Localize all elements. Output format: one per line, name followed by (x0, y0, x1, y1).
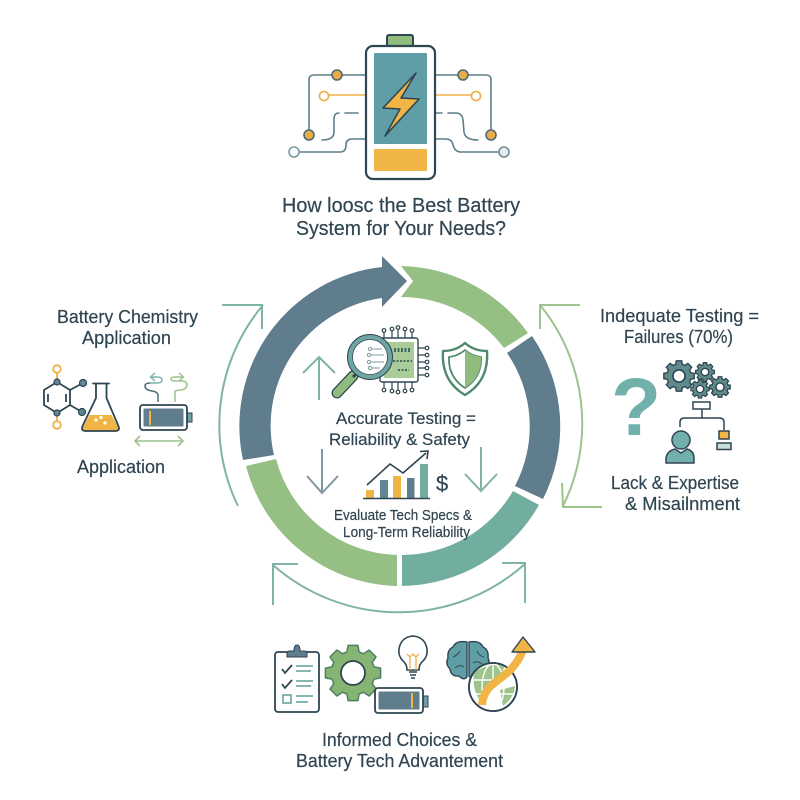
chip body (380, 338, 418, 382)
growth arrow (482, 650, 523, 705)
icon: low battery (375, 688, 428, 713)
circuit traces (299, 75, 499, 152)
magnifier lens (350, 337, 390, 377)
segment: green top (401, 266, 528, 348)
heading: inadequate testing: Indequate Testing = (600, 306, 759, 326)
heading: inadequate testing (600, 306, 759, 347)
battery body (366, 46, 435, 179)
segment: dark arrow (239, 256, 407, 460)
magnifier handle (337, 376, 353, 393)
title: System for Your Needs? (296, 217, 506, 240)
icon: flask (82, 384, 119, 431)
icon: question mark: ? (611, 362, 661, 453)
icon: light bulb (399, 636, 427, 678)
arrow: left outer arc (219, 305, 263, 506)
segment: green bottom (246, 459, 397, 586)
title: How loosc the Best Battery (282, 194, 521, 217)
title (282, 194, 521, 240)
heading: accurate testing: Accurate Testing = (336, 409, 476, 428)
double arrow (135, 436, 183, 446)
heading: battery chemistry: Battery Chemistry (57, 307, 198, 327)
arrow: right outer arc (540, 305, 602, 507)
segment: dark right (507, 336, 560, 499)
text: informed choices: Informed Choices & (322, 730, 477, 750)
text: informed choices (296, 730, 503, 771)
icon: shield (443, 343, 487, 395)
segment: teal (402, 491, 539, 586)
lightning bolt (383, 73, 419, 136)
heading: accurate testing: Reliability & Safety (329, 430, 470, 449)
icon: molecule (44, 365, 86, 429)
icon: battery with circuit traces (289, 35, 509, 179)
icon: green gear (325, 645, 381, 701)
arrow: bottom outer arc (273, 563, 525, 612)
icon: brain (447, 642, 489, 679)
text: informed choices: Battery Tech Advantement (296, 751, 503, 771)
arrow: teal down (465, 447, 497, 491)
dollar sign: $ (436, 471, 448, 496)
heading: inadequate testing: Failures (70%) (624, 327, 733, 347)
reserve bar (374, 149, 427, 171)
text: lack of expertise (611, 473, 740, 514)
icon: globe with growth arrow (469, 637, 535, 711)
arrow: slate down (307, 449, 338, 493)
text: lack of expertise: & Misailnment (625, 494, 740, 514)
text: evaluate specs: Long-Term Reliability (343, 525, 471, 541)
heading: battery chemistry (57, 307, 198, 348)
icon: org chart and person (666, 402, 731, 463)
charge panel (374, 53, 427, 144)
text: evaluate specs (334, 508, 472, 541)
cycle ring (239, 256, 560, 586)
person (672, 431, 690, 449)
heading: accurate testing (329, 409, 476, 449)
battery terminal (387, 35, 413, 46)
icon: clipboard (275, 645, 319, 712)
label: application: Application (77, 457, 165, 477)
icon: magnifier over chip (337, 326, 429, 394)
text: lack of expertise: Lack & Expertise (611, 473, 739, 493)
heading: battery chemistry: Application (82, 328, 171, 348)
chip pins (382, 326, 429, 394)
text: evaluate specs: Evaluate Tech Specs & (334, 508, 472, 524)
chart: rising bars (363, 451, 448, 498)
arrow: teal up (303, 357, 335, 400)
icon: gears (664, 361, 730, 398)
icon: battery with flows (135, 373, 192, 446)
